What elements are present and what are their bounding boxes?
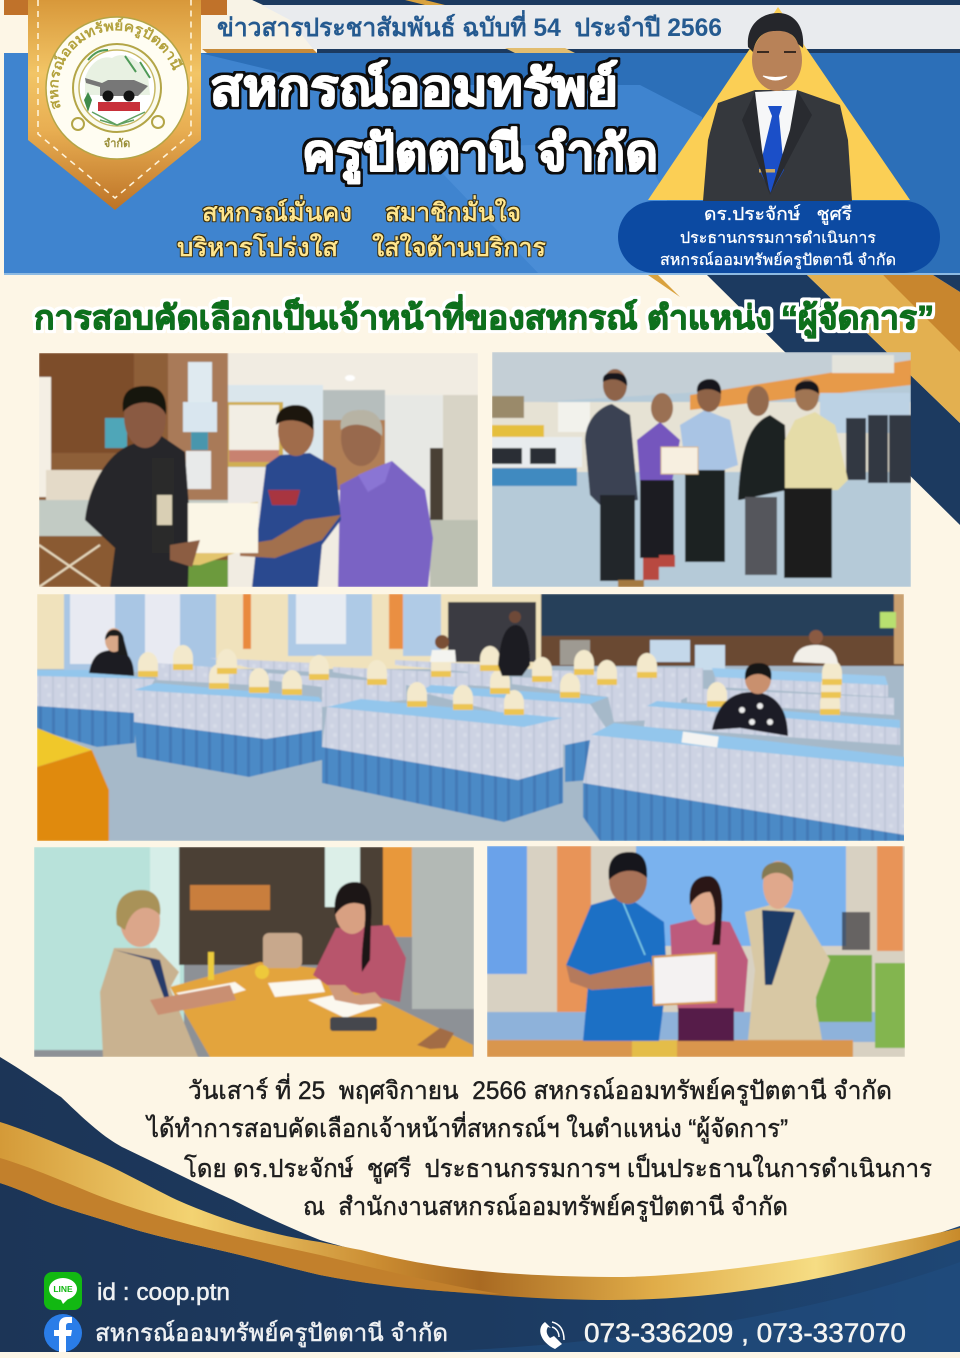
lower lighter wave bbox=[430, 1262, 960, 1352]
president name plate bbox=[618, 201, 940, 273]
announcement text: ณ สำนักงานสหกรณ์ออมทรัพย์ครูปัตตานี จำกัด bbox=[303, 1193, 788, 1222]
slogans: สหกรณ์มั่นคง bbox=[202, 195, 352, 227]
gold ribbon band bbox=[0, 1122, 960, 1300]
announcement text: โดย ดร.ประจักษ์ ชูศรี ประธานกรรมการฯ เป็นประธานในการดำเนินการ bbox=[184, 1153, 932, 1184]
photo: handing over document in lobby bbox=[39, 353, 478, 587]
logo seal bbox=[45, 16, 189, 160]
slogans: บริหารโปร่งใส bbox=[177, 233, 338, 262]
diagonal accents below header bbox=[648, 275, 960, 525]
icon: LINE bbox=[44, 1272, 82, 1310]
photo: exam hall with tables bbox=[37, 594, 905, 841]
slogans bbox=[177, 195, 546, 262]
phone numbers: 073-336209 , 073-337070 bbox=[584, 1318, 906, 1348]
icon: phone bbox=[540, 1322, 564, 1349]
president name plate: ดร.ประจักษ์ ชูศรี bbox=[704, 204, 852, 225]
bottom navy wave bbox=[0, 1057, 960, 1352]
cooperative name title: ครูปัตตานี จำกัด bbox=[302, 125, 658, 184]
icon: LINE: LINE bbox=[53, 1284, 73, 1294]
announcement text: ได้ทำการสอบคัดเลือกเจ้าหน้าที่สหกรณ์ฯ ในตำแหน่ง “ผู้จัดการ” bbox=[145, 1111, 788, 1144]
slogans: สมาชิกมั่นใจ bbox=[385, 195, 521, 227]
Facebook page name: สหกรณ์ออมทรัพย์ครูปัตตานี จำกัด bbox=[95, 1319, 448, 1348]
icon: Facebook bbox=[44, 1314, 82, 1352]
photo: certificate presentation bbox=[487, 846, 905, 1057]
president name plate: สหกรณ์ออมทรัพย์ครูปัตตานี จำกัด bbox=[660, 251, 896, 270]
main heading: การสอบคัดเลือกเป็นเจ้าหน้าที่ของสหกรณ์ ตำแหน่ง “ผู้จัดการ” bbox=[34, 294, 934, 339]
logo seal: สหกรณ์ออมทรัพย์ครูปัตตานี bbox=[50, 18, 184, 110]
announcement text: วันเสาร์ ที่ 25 พฤศจิกายน 2566 สหกรณ์ออมทรัพย์ครูปัตตานี จำกัด bbox=[188, 1073, 892, 1106]
newsletter issue line: ข่าวสารประชาสัมพันธ์ ฉบับที่ 54 ประจำปี 2566 bbox=[217, 10, 722, 42]
logo seal: จำกัด bbox=[104, 137, 130, 150]
header top strip bbox=[202, 0, 960, 53]
cooperative name title bbox=[210, 60, 658, 184]
announcement text bbox=[145, 1073, 932, 1222]
LINE id: id : coop.ptn bbox=[97, 1279, 230, 1306]
slogans: ใส่ใจด้านบริการ bbox=[372, 233, 546, 262]
ribbon with logo bbox=[4, 0, 227, 210]
photo: two women at wooden table bbox=[34, 847, 474, 1057]
president portrait bbox=[648, 7, 910, 201]
photo: group of five in hall bbox=[492, 352, 911, 587]
cooperative name title: สหกรณ์ออมทรัพย์ bbox=[210, 60, 618, 116]
president name plate: ประธานกรรมการดำเนินการ bbox=[680, 230, 876, 247]
header blue panel bbox=[4, 53, 960, 275]
